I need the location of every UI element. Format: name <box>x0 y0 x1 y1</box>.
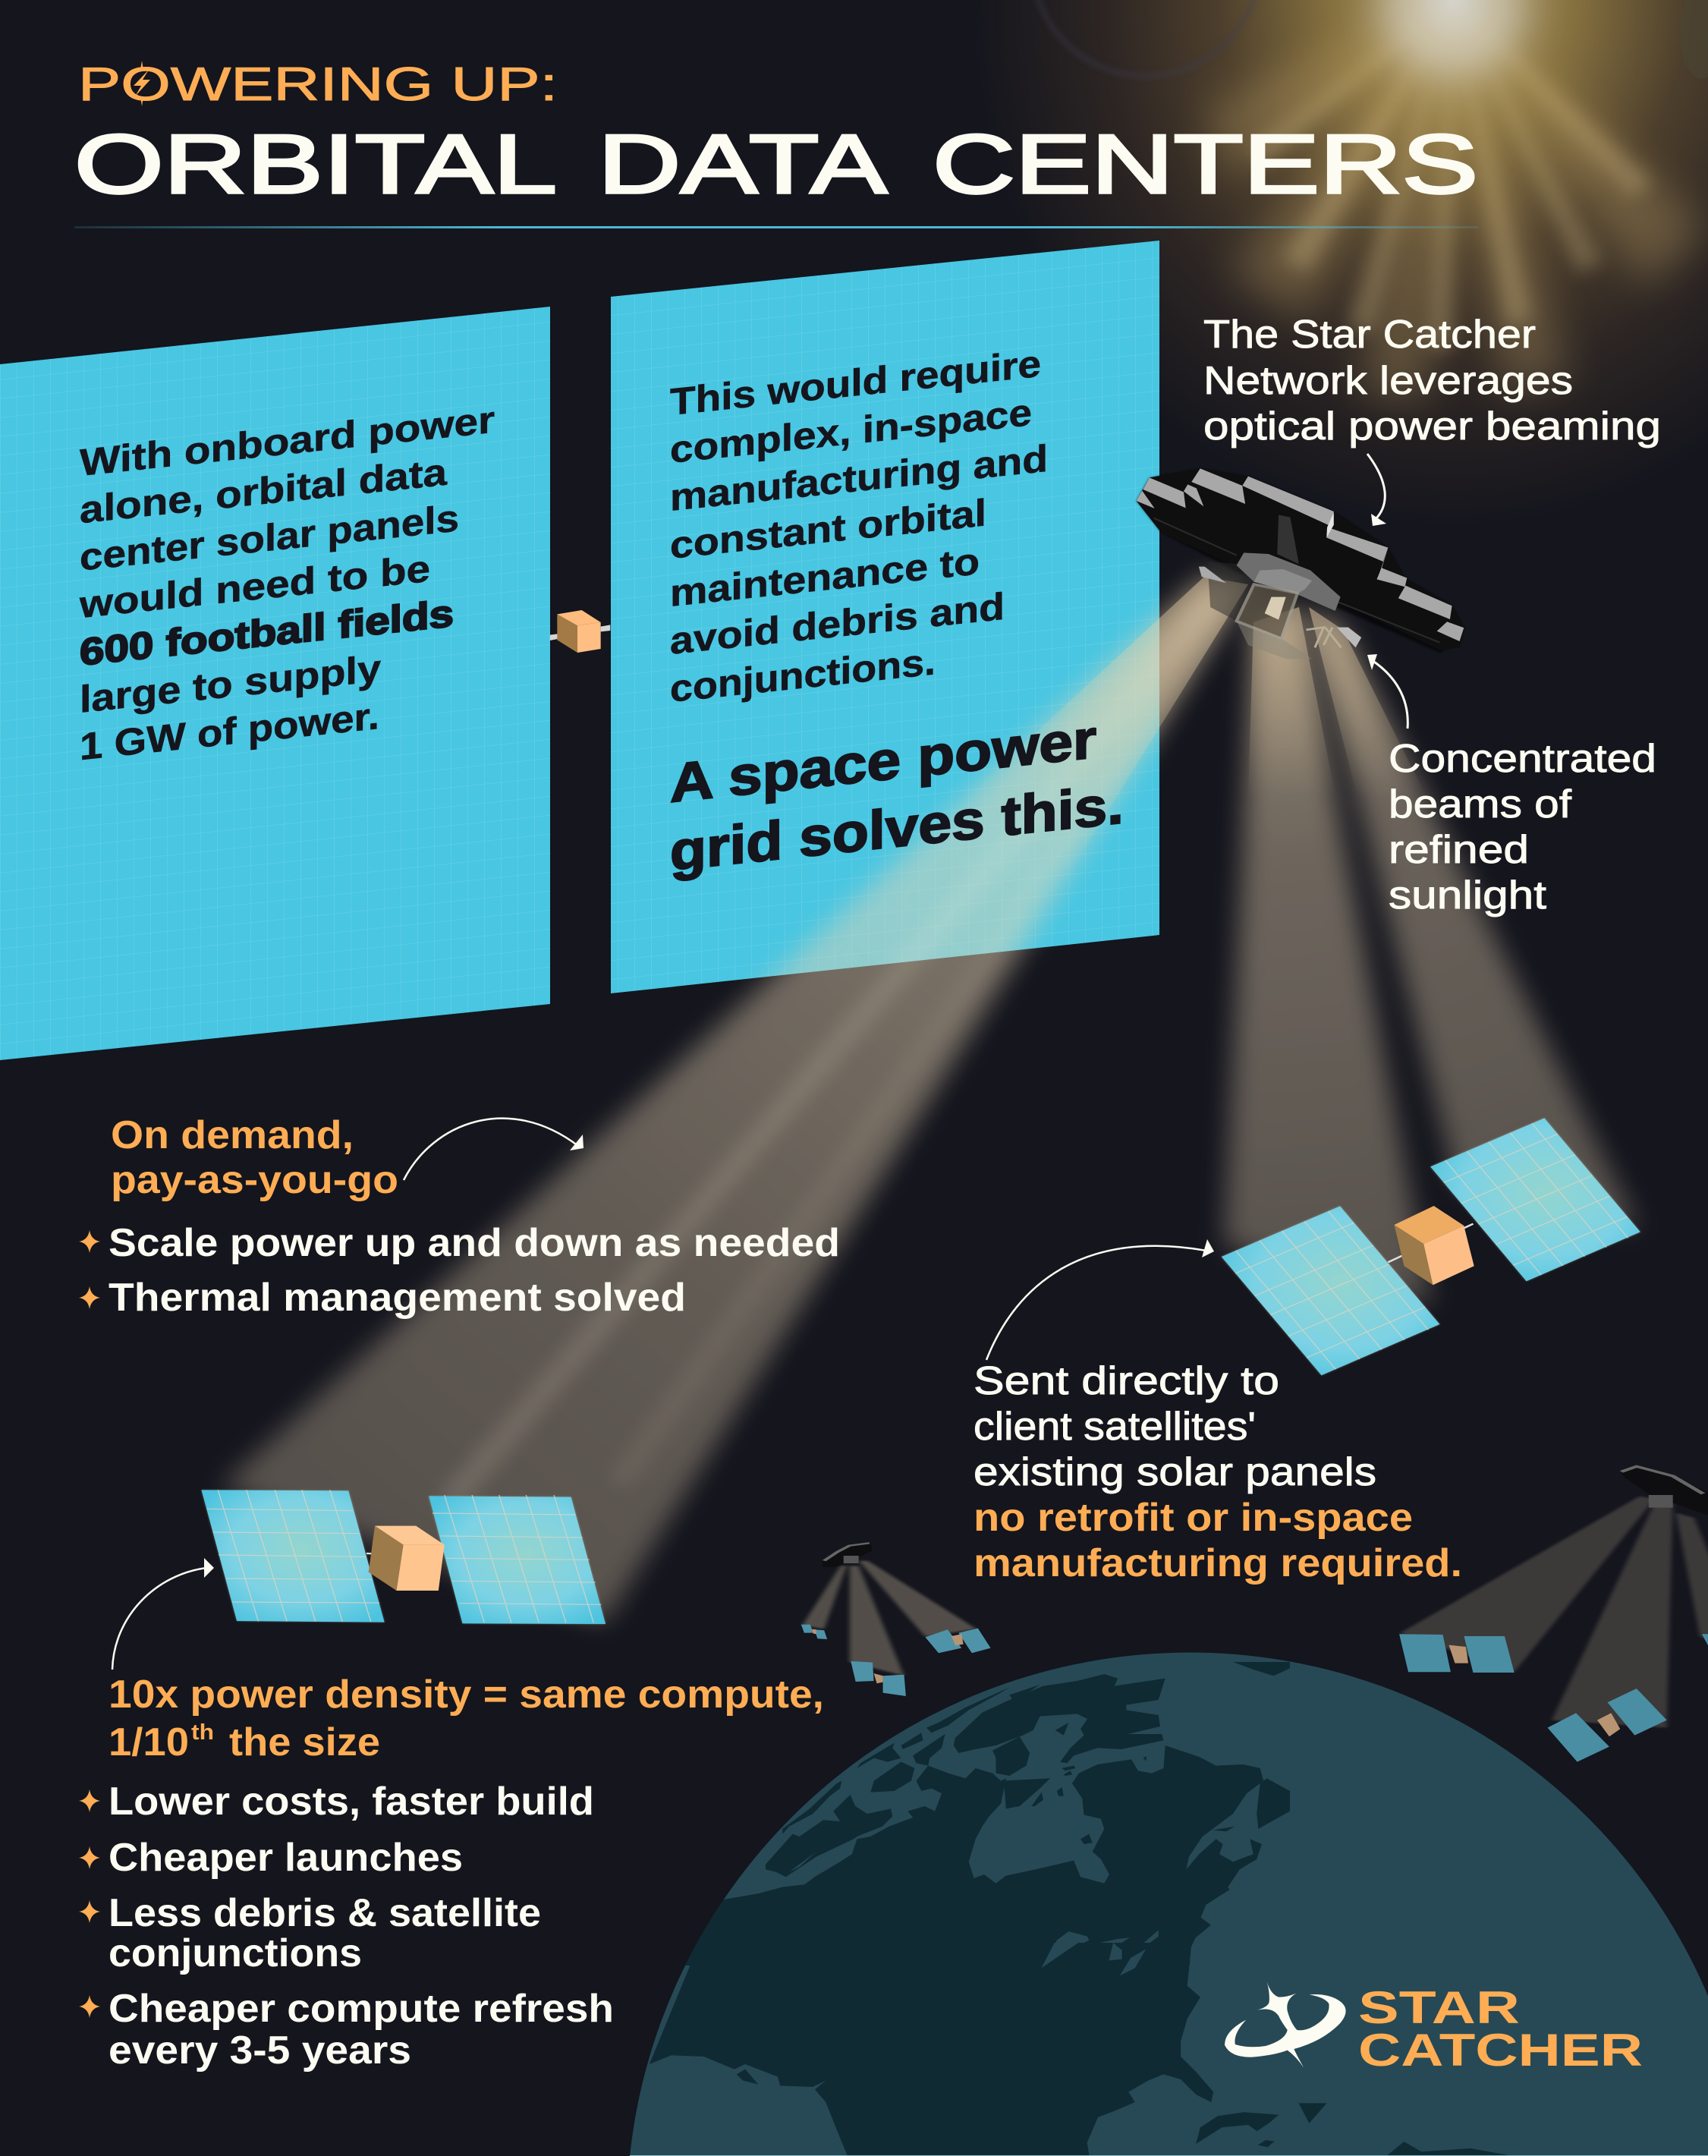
annotation: star catcher network: optical power beaming <box>1203 404 1661 449</box>
annotation: star catcher network <box>1203 313 1661 449</box>
callout: no retrofit: manufacturing required. <box>974 1541 1462 1585</box>
icon: bullet star <box>79 1995 100 2018</box>
text: left panel copy: center solar panels <box>80 496 459 579</box>
annotation: concentrated beams: Concentrated <box>1389 737 1656 781</box>
beam: to left data center <box>221 577 1248 1623</box>
list: power density benefits: Lower costs, faster build <box>109 1780 594 1824</box>
land: united states and mexico <box>650 1943 1279 2156</box>
annotation: concentrated beams: beams of <box>1389 782 1572 826</box>
beam: to right client satellite two <box>1309 607 1639 1229</box>
icon: bullet star <box>79 1789 100 1812</box>
text: on demand heading <box>111 1113 398 1202</box>
list: power density benefits: Less debris & satellite <box>109 1891 541 1935</box>
text: right panel copy <box>670 333 1124 883</box>
water: great lakes <box>789 1852 1159 1943</box>
text: right panel copy: constant orbital <box>670 491 986 567</box>
text: power density heading: 10x power density = same compute, <box>109 1673 824 1717</box>
list: on demand benefits: Scale power up and down as needed <box>109 1221 840 1265</box>
distant constellation: right satellite <box>1399 1466 1708 1762</box>
list: power density benefits: Cheaper launches <box>109 1836 463 1880</box>
annotation: concentrated beams: sunlight <box>1389 873 1547 917</box>
text: right panel copy: complex, in-space <box>670 391 1032 471</box>
panel: right solar panel <box>611 241 1159 993</box>
annotation: star catcher network: The Star Catcher <box>1203 313 1536 357</box>
logo: star catcher: CATCHER <box>1358 2025 1643 2076</box>
annotation: concentrated beams <box>1389 737 1656 917</box>
text: sent directly <box>974 1359 1462 1585</box>
callout: no retrofit: no retrofit or in-space <box>974 1496 1413 1540</box>
distant constellation: left satellite <box>801 1543 991 1696</box>
icon: bullet star <box>79 1900 100 1923</box>
title: orbital data centers: DATA <box>598 118 888 211</box>
list: on demand benefits <box>79 1221 840 1320</box>
text: right panel copy: manufacturing and <box>670 437 1048 519</box>
satellite: data center, bottom left <box>201 1490 606 1624</box>
icon: logo star and orbit <box>1225 1982 1346 2067</box>
text: right panel copy: conjunctions. <box>670 640 936 710</box>
text: sent directly: existing solar panels <box>974 1450 1376 1494</box>
text: power density heading: the size <box>229 1720 380 1764</box>
divider <box>74 226 1478 228</box>
text: left panel copy <box>79 398 495 768</box>
title: powering up: POWERING UP: <box>78 58 558 111</box>
annotation: star catcher network: Network leverages <box>1203 359 1573 403</box>
text: on demand heading: On demand, <box>111 1113 354 1157</box>
icon: bullet star <box>79 1846 100 1869</box>
panel: left solar panel <box>0 307 550 1060</box>
text: right panel copy: avoid debris and <box>670 585 1005 663</box>
list: on demand benefits: Thermal management solved <box>109 1276 686 1320</box>
icon: lightning bolt in the O <box>134 61 150 106</box>
text: on demand heading: pay-as-you-go <box>111 1158 398 1202</box>
callout: space power grid: A space power <box>670 709 1096 814</box>
icon: bullet star <box>79 1230 100 1253</box>
title: orbital data centers: CENTERS <box>933 118 1478 211</box>
beam: to right client satellite one <box>1224 607 1431 1305</box>
list: power density benefits: Cheaper compute refresh <box>109 1987 614 2031</box>
text: power density heading: 1/10 <box>109 1720 189 1764</box>
annotation: concentrated beams: refined <box>1389 828 1529 872</box>
text: sent directly: Sent directly to <box>974 1359 1279 1403</box>
logo: star catcher: STAR <box>1358 1982 1520 2033</box>
callout: space power grid: grid solves this. <box>670 774 1124 883</box>
earth <box>630 1653 1708 2156</box>
land: canada and arctic <box>657 1662 1290 1966</box>
text: power density heading: th <box>191 1720 214 1745</box>
logo: star catcher <box>1225 1982 1643 2076</box>
icon: data center module between panels <box>550 610 610 653</box>
title: orbital data centers: ORBITAL <box>74 118 557 211</box>
satellite: star catcher power station <box>1137 468 1464 659</box>
list: power density benefits: every 3-5 years <box>109 2029 411 2073</box>
arrow: to satellite wing <box>1367 454 1386 526</box>
title: orbital data centers <box>74 118 1478 211</box>
satellite: client right, receiving panels <box>1222 1118 1640 1375</box>
text: left panel copy: With onboard power <box>80 398 495 484</box>
callout: space power grid <box>670 706 1124 883</box>
text: left panel copy: 1 GW of power. <box>80 694 379 768</box>
icon: bullet star <box>79 1286 100 1309</box>
sun glare <box>967 0 1708 531</box>
text: right panel copy: This would require <box>670 342 1041 423</box>
text: right panel copy: maintenance to <box>670 540 980 615</box>
text: left panel copy: alone, orbital data <box>80 451 448 531</box>
callout: no retrofit <box>974 1496 1462 1585</box>
text: left panel copy: would need to be <box>79 547 430 626</box>
text: power density heading <box>109 1673 824 1764</box>
land: cuba and caribbean <box>1196 2112 1279 2147</box>
arrow: to client panels <box>986 1239 1214 1360</box>
arrow: to data center panels <box>112 1558 214 1670</box>
text: left panel copy: 600 football fields <box>80 592 454 674</box>
text: sent directly: client satellites' <box>974 1405 1256 1449</box>
list: power density benefits: conjunctions <box>109 1931 362 1975</box>
arrow: to concentrated beams <box>1367 654 1408 729</box>
text: left panel copy: large to supply <box>80 647 381 721</box>
arrow: on demand to beam <box>404 1119 583 1180</box>
list: power density benefits <box>79 1780 614 2073</box>
